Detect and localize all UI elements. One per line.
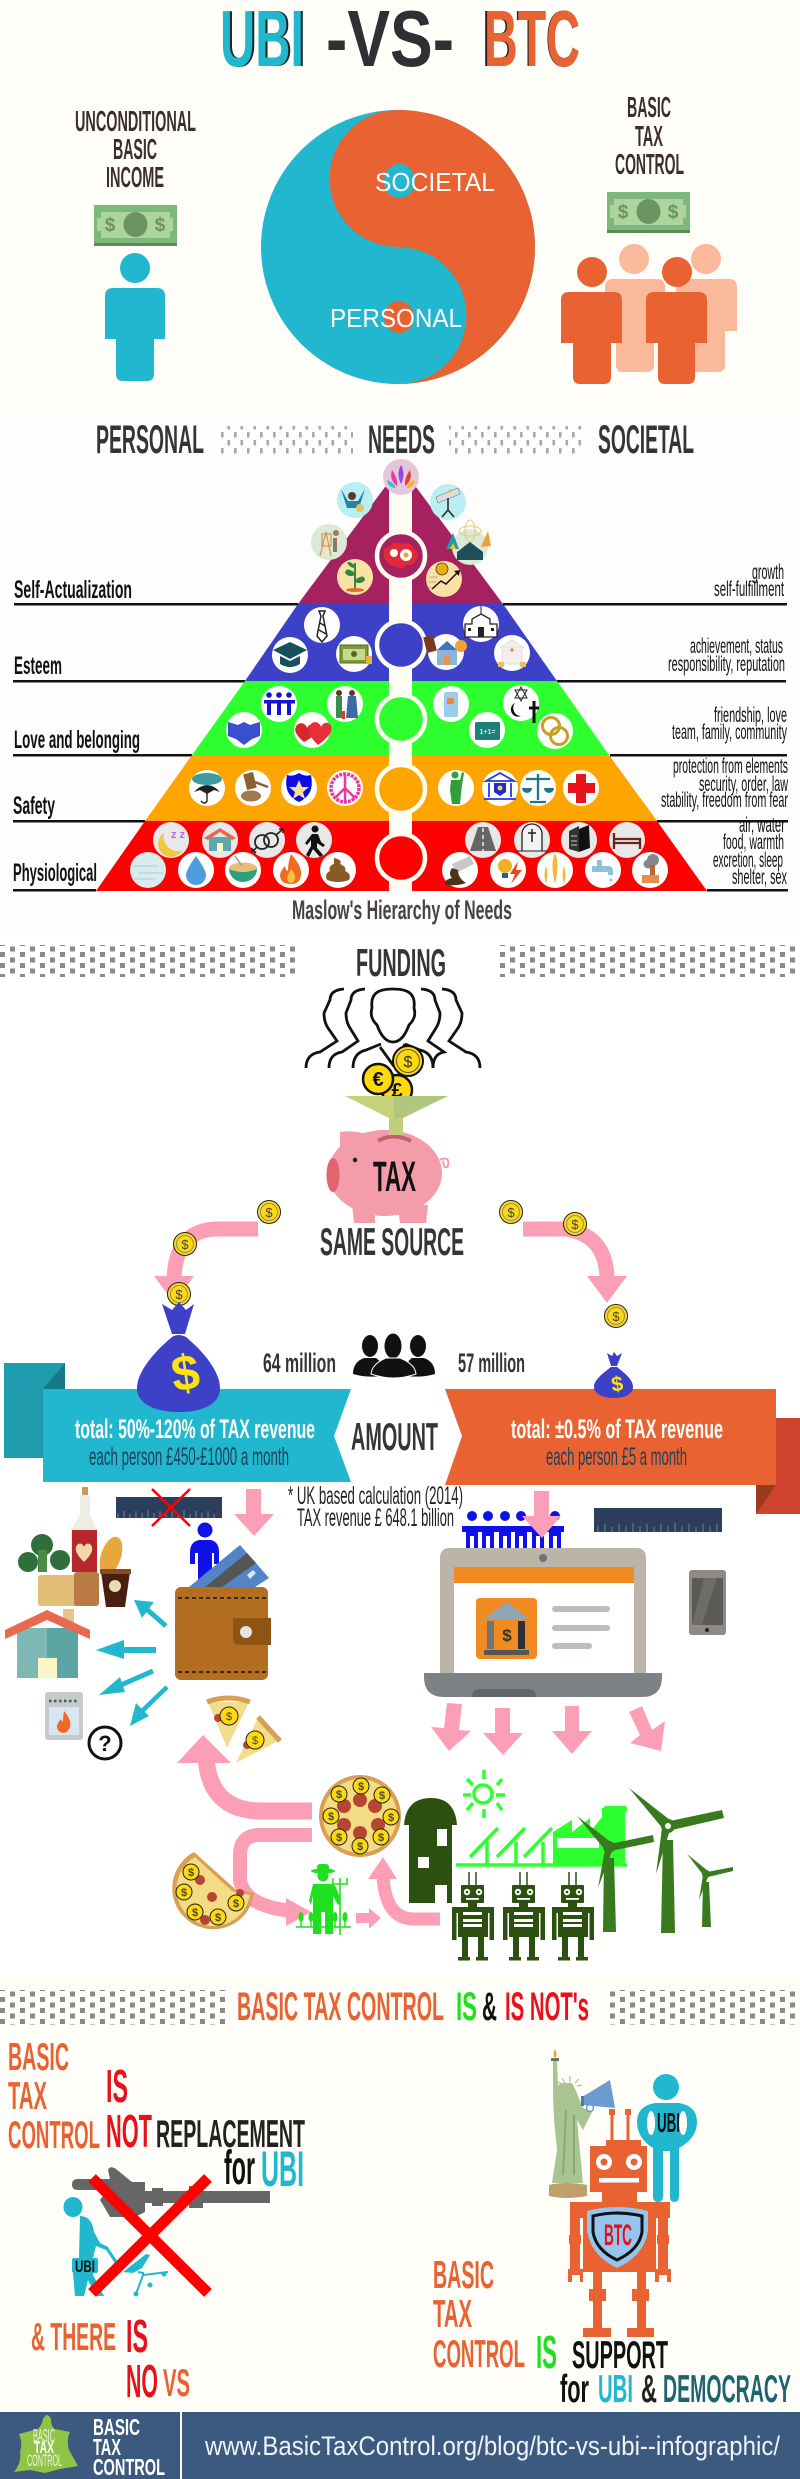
icon: question mark: ? [98, 1731, 112, 1756]
icon: banknote left [94, 205, 177, 246]
icon: banknote right: $ [618, 202, 629, 223]
icon: farm silo [404, 1798, 457, 1903]
icon: partly eaten pizza: $ [188, 1867, 194, 1879]
section heading: is and is nots: IS [456, 1985, 477, 2029]
icon: BTC robot: BTC [604, 2219, 632, 2252]
icon: food bowl [225, 852, 261, 888]
icon: wedding rings [537, 713, 573, 749]
footer wordmark [93, 2414, 165, 2479]
icon: puzzle logo [14, 2415, 78, 2473]
icon: state building [463, 606, 499, 642]
icon: science [446, 520, 491, 565]
yin yang diagram [261, 110, 535, 384]
section heading: personal needs societal [96, 418, 694, 462]
icon: smartphone [689, 1570, 726, 1635]
text: not replacement for UBI [8, 2036, 305, 2197]
icon: cash stack [336, 636, 372, 672]
icon: fire [273, 852, 309, 888]
arrow: machines to pizza [368, 1857, 440, 1919]
heading: unconditional basic income [75, 106, 196, 194]
icon: puzzle logo: TAX [34, 2438, 54, 2457]
icon: hearts [294, 712, 332, 748]
icon: wallet with card [175, 1545, 271, 1680]
text: there is no vs: VS [163, 2362, 190, 2405]
icon: whole pizza with coins: $ [336, 1832, 342, 1844]
icon: police station [482, 770, 518, 806]
icon: family [327, 686, 363, 722]
icon: handshake [226, 712, 262, 748]
footer wordmark: BASIC [93, 2414, 140, 2440]
arrow: pizza share to people [177, 1735, 312, 1811]
icon: bank [494, 635, 530, 671]
text: SOCIETAL [598, 418, 694, 462]
population counts [263, 1348, 525, 1378]
text: BTC is support: CONTROL [433, 2333, 525, 2376]
icon: whole pizza with coins: $ [379, 1790, 385, 1802]
icon: peace sign [327, 770, 363, 806]
text: not replacement for UBI: TAX [8, 2075, 47, 2118]
icon: school [423, 634, 467, 670]
icon: walking person [296, 822, 332, 858]
icon: blackboard [469, 712, 505, 748]
icon: flow coins: $ [612, 1309, 620, 1324]
banner: UBI total: total: 50%-120% of TAX revenue [75, 1414, 315, 1444]
icon: banknote left: $ [155, 215, 166, 236]
icon: plant [337, 559, 373, 595]
icon: whole pizza with coins: $ [357, 1841, 363, 1853]
arrow: farmer to machines [356, 1908, 381, 1929]
icon: measuring bar [594, 1508, 722, 1532]
icon: red cross [563, 770, 599, 806]
yin yang diagram: PERSONAL [330, 303, 462, 333]
icon: banknote right: $ [668, 202, 679, 223]
icon: bed [609, 822, 645, 858]
left level labels: Esteem [14, 652, 62, 680]
population counts: 64 million [263, 1348, 336, 1378]
heading: unconditional basic income: BASIC [113, 134, 157, 166]
icon: partly eaten pizza [172, 1852, 254, 1929]
icon: laptop with bank: $ [502, 1626, 512, 1645]
icon: falling coins [363, 1046, 423, 1105]
text: not replacement for UBI: UBI [261, 2141, 304, 2197]
banner: UBI total: each person £450-£1000 a month [89, 1443, 289, 1471]
icon: team [261, 686, 297, 722]
text: BTC is support: BASIC [433, 2254, 494, 2297]
icon: whole pizza with coins: $ [358, 1781, 364, 1793]
icon: lotus top [383, 459, 419, 495]
text: CONTROL [615, 149, 684, 181]
icon: large money bag [137, 1302, 220, 1412]
icon: falling coins: € [372, 1069, 384, 1091]
icon: growth chart [426, 561, 462, 597]
yin yang diagram: SOCIETAL [375, 167, 495, 197]
icon: small money bag [594, 1352, 633, 1398]
section heading: funding: FUNDING [356, 942, 446, 985]
text: BTC is support: for [560, 2368, 589, 2411]
footer bar [0, 2412, 800, 2479]
left level labels: Physiological [13, 859, 97, 887]
icon: partly eaten pizza: $ [192, 1907, 198, 1919]
icon: gavel [235, 770, 271, 806]
icon: statue of liberty [549, 2049, 592, 2198]
icon: road [465, 822, 501, 858]
text: BTC is support [433, 2254, 791, 2411]
text: not replacement for UBI: for [224, 2142, 255, 2195]
section heading: is and is nots: IS NOT's [505, 1985, 589, 2029]
red cross-out [92, 2178, 208, 2293]
icon: question mark [89, 1727, 121, 1759]
icon: achiever [337, 482, 373, 518]
icon: pizza slices: $ [226, 1711, 232, 1723]
icon: flow coins [168, 1200, 628, 1328]
icon: house large [5, 1609, 90, 1678]
icon: necktie [304, 607, 340, 643]
pyramid caption: Maslow's Hierarchy of Needs [292, 895, 512, 925]
icon: measuring bar crossed [116, 1489, 222, 1526]
icon: sewage [442, 852, 478, 888]
icon: whole pizza with coins: $ [336, 1789, 342, 1801]
arrow: share to farmer [240, 1835, 312, 1926]
icon: piggy bank: TAX [373, 1153, 416, 1201]
icon: people group blue [462, 1511, 564, 1548]
text: not replacement for UBI: REPLACEMENT [156, 2113, 305, 2156]
icon: robots [452, 1872, 594, 1960]
icon: laptop with bank [424, 1548, 662, 1697]
population counts: 57 million [458, 1348, 525, 1378]
icon: puzzle logo: BASIC [33, 2426, 55, 2446]
icon: excretion [320, 852, 356, 888]
icon: wheat [537, 852, 573, 888]
icon: blue person [190, 1522, 219, 1590]
icon: religion symbols [503, 685, 539, 723]
icon: flow coins: $ [175, 1287, 183, 1302]
icon: solar panels and factory [456, 1806, 627, 1866]
arrow: tax to UBI [154, 1229, 258, 1303]
left level labels: Love and belonging [14, 726, 140, 754]
icon: pointing hand [72, 2167, 270, 2217]
icon: partly eaten pizza: $ [181, 1887, 187, 1899]
icon: whole pizza with coins: $ [378, 1832, 384, 1844]
footnote: TAX revenue £ 648.1 billion [297, 1504, 454, 1532]
icon: food and drink [18, 1487, 131, 1607]
icon: piggy bank [326, 1130, 448, 1223]
icon: factory smoke [632, 852, 668, 888]
icon: umbrella storm [189, 770, 225, 806]
icon: population silhouettes [353, 1333, 435, 1378]
icon: funnel [345, 1096, 448, 1135]
banner: BTC total [445, 1389, 800, 1514]
amount label: AMOUNT [351, 1416, 438, 1459]
text: BTC is support: SUPPORT [572, 2334, 668, 2377]
text: not replacement for UBI: CONTROL [8, 2114, 100, 2157]
heading: basic tax control: BASIC [627, 92, 671, 124]
heading: basic tax control: TAX [635, 121, 663, 153]
icon: UBI person with robot: UBI [657, 2107, 680, 2138]
icon: sleep moon: z z [171, 829, 186, 841]
icon: police badge [281, 770, 317, 806]
icon: sun [463, 1770, 505, 1818]
left level labels [13, 576, 140, 887]
icon: house [202, 822, 238, 858]
icon: graduation cap [272, 637, 308, 673]
section heading: personal needs societal: PERSONAL [96, 418, 204, 462]
banner: UBI total [4, 1363, 351, 1482]
icon: UBI person with robot [637, 2074, 697, 2202]
pyramid: maslow levels [96, 486, 707, 891]
icon: banknote right [607, 192, 690, 233]
icon: wind turbines [577, 1788, 733, 1933]
section heading: is and is nots: & [482, 1985, 497, 2029]
icon: water tap [585, 852, 621, 888]
icon: skyscrapers [561, 822, 597, 858]
icon: puzzle logo: CONTROL [27, 2451, 62, 2470]
footer wordmark: TAX [93, 2434, 121, 2460]
text: there is no vs: IS [126, 2310, 148, 2362]
left level labels: Safety [13, 792, 55, 820]
icon: farmer [296, 1864, 351, 1935]
icon: whole pizza with coins [319, 1775, 401, 1857]
text: there is no vs [31, 2310, 190, 2407]
icon: megaphone [581, 2080, 615, 2112]
icon: painter [311, 524, 347, 560]
footnote: * UK based calculation (2014) [288, 1482, 463, 1510]
section heading: personal needs societal: NEEDS [368, 418, 435, 462]
icon: gravestone [514, 822, 550, 858]
icon: partly eaten pizza: $ [233, 1898, 239, 1910]
arrows: spending [96, 1600, 167, 1726]
icon: person leaving with chair [64, 2197, 168, 2296]
icon: scales [520, 770, 556, 806]
icon: single person teal [105, 253, 165, 381]
icon: mist air [130, 852, 166, 888]
section heading: is and is nots [0, 1985, 800, 2029]
text: BTC is support: IS [536, 2326, 557, 2378]
level divider lines [13, 603, 788, 892]
text: not replacement for UBI: BASIC [8, 2036, 69, 2079]
icon: crowd of taxpayers [306, 989, 480, 1068]
arrow: into wallet [234, 1489, 274, 1536]
text: BTC is support: & [641, 2368, 657, 2411]
icon: group of people orange [561, 244, 737, 384]
footnote [288, 1482, 463, 1532]
icon: smartphone [433, 686, 469, 722]
icon: banknote left: $ [105, 215, 116, 236]
icon: oven [45, 1692, 83, 1740]
text: UNCONDITIONAL [75, 106, 196, 138]
text: there is no vs: & THERE [31, 2316, 116, 2359]
heading: basic tax control [615, 92, 684, 181]
left level labels: Self-Actualization [14, 576, 132, 604]
icon: whole pizza with coins: $ [328, 1811, 334, 1823]
icon: sleep moon [153, 822, 189, 858]
right level labels [661, 561, 788, 889]
icon: blackboard: 1+1= [480, 729, 495, 736]
text: there is no vs: NO [126, 2355, 158, 2407]
text: not replacement for UBI: IS [106, 2060, 128, 2112]
heading: unconditional basic income: INCOME [106, 162, 164, 194]
text: BTC is support: UBI [598, 2368, 633, 2411]
arrow: into laptop [522, 1491, 561, 1538]
icon: pizza slices: $ [252, 1735, 258, 1747]
text: SAME SOURCE [320, 1221, 464, 1264]
icon: small money bag: $ [610, 1372, 625, 1397]
arrow: tax to BTC [523, 1229, 627, 1303]
arrows: funding flows [431, 1703, 665, 1755]
icon: pizza slices [207, 1698, 280, 1763]
icon: falling coins: £ [391, 1080, 403, 1102]
icon: flow coins: $ [571, 1217, 579, 1232]
text: not replacement for UBI: NOT [106, 2105, 152, 2157]
icon: water drop [178, 852, 214, 888]
icon: large money bag: $ [168, 1343, 203, 1403]
icon: electricity [490, 852, 526, 888]
text: BTC is support: TAX [433, 2293, 472, 2336]
icon: gender symbols [249, 822, 285, 858]
icon: BTC robot [568, 2109, 671, 2337]
icon: falling coins: $ [404, 1054, 413, 1071]
section heading: funding [0, 942, 800, 985]
title [220, 0, 580, 83]
icon: flow coins: $ [181, 1237, 189, 1252]
icon: person leaving with chair: UBI [75, 2257, 95, 2276]
icon: soldier [438, 770, 474, 806]
icon: partly eaten pizza: $ [215, 1912, 221, 1924]
icon: flow coins: $ [507, 1205, 515, 1220]
icon: flow coins: $ [265, 1205, 273, 1220]
icon: telescope [430, 484, 466, 520]
icon: whole pizza with coins: $ [388, 1812, 394, 1824]
section heading: is and is nots: BASIC TAX CONTROL [237, 1985, 444, 2029]
icon: brain gears [383, 543, 418, 569]
